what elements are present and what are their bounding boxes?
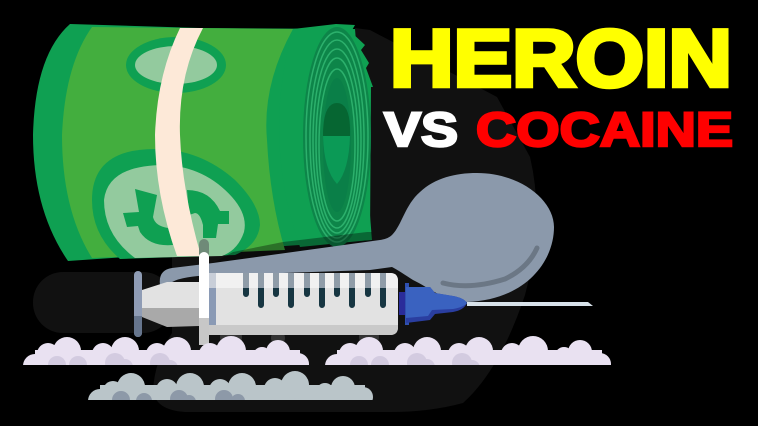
spoon shadow on roll	[200, 232, 372, 270]
syringe shadow	[33, 272, 173, 333]
measurement ticks	[243, 273, 386, 308]
long shadow behind objects	[153, 28, 536, 412]
barrel	[209, 273, 398, 335]
money roll	[33, 24, 373, 270]
note face	[62, 27, 293, 258]
roll outer edge	[33, 24, 372, 261]
large dollar oval	[92, 149, 260, 259]
powder shading 2	[350, 353, 480, 365]
syringe	[134, 239, 593, 348]
finger flange	[199, 239, 209, 345]
plunger flange	[134, 271, 142, 337]
title: heroin: HEROIN	[390, 14, 732, 104]
needle	[467, 302, 593, 306]
barrel shadow bumps	[220, 326, 379, 348]
spoon body	[160, 173, 554, 302]
spoon crease	[443, 248, 537, 286]
small portrait oval	[126, 37, 226, 93]
roll core	[323, 103, 350, 184]
dollar sign	[123, 189, 229, 245]
subtitle: cocaine: COCAINE	[476, 104, 733, 157]
plunger head	[142, 282, 199, 327]
powder shading 1	[48, 353, 178, 365]
roll end with jagged paper	[279, 24, 373, 247]
subtitle: vs: VS	[384, 104, 458, 157]
needle hub	[399, 283, 467, 325]
spoon	[160, 173, 554, 302]
powder pile 3	[88, 371, 373, 400]
paper band	[155, 28, 203, 256]
powder shading 3	[112, 390, 245, 400]
powder pile 1	[23, 336, 309, 365]
powder pile 2	[325, 336, 611, 365]
paper spiral rings	[303, 27, 371, 247]
